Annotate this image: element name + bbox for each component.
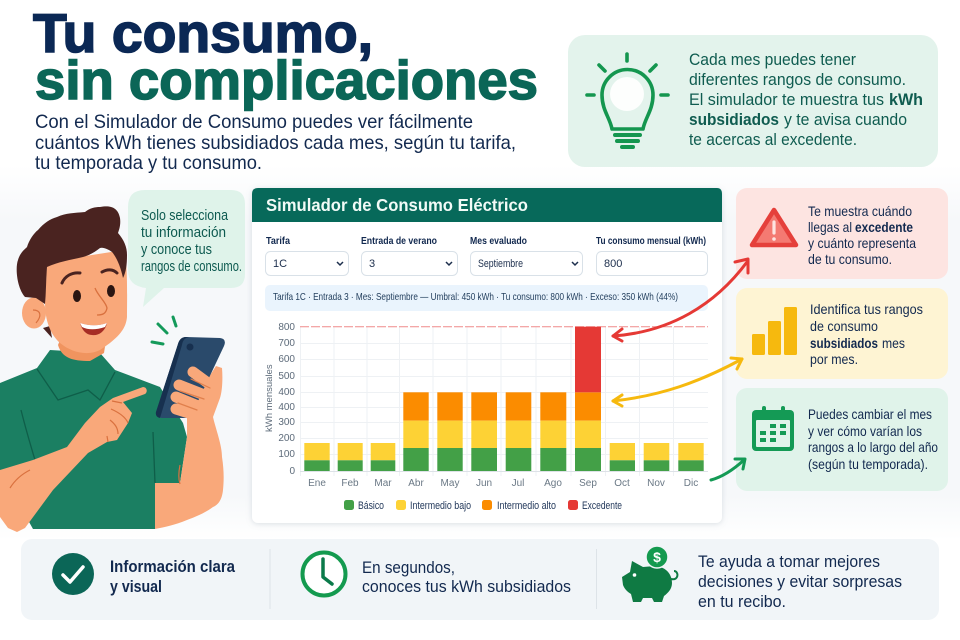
intro text <box>35 111 516 174</box>
benefit: recibo: $ <box>653 549 661 565</box>
x axis: Ago <box>544 478 562 489</box>
x axis: Feb <box>341 478 359 489</box>
pointing arm <box>0 387 147 532</box>
speech bubble: tu información <box>141 225 226 241</box>
benefit: segundos: conoces tus kWh subsidiados <box>362 578 571 596</box>
x axis: Dic <box>684 478 698 489</box>
tip text: te acercas al excedente. <box>689 130 857 149</box>
y axis: 0 <box>289 466 295 477</box>
simulator header <box>252 188 722 222</box>
x axis: Jul <box>512 478 524 489</box>
form controls: Septiembre <box>478 258 523 270</box>
y axis <box>278 322 295 477</box>
x axis: Mar <box>374 478 392 489</box>
benefit: clara: Información clara <box>110 558 236 576</box>
form controls: 1C <box>273 258 287 270</box>
form controls: 800 <box>604 258 622 270</box>
x axis: Ene <box>308 478 326 489</box>
calendario text: (según tu temporada). <box>808 456 928 472</box>
tip text: kWh <box>889 90 923 109</box>
excedente text: y cuánto representa <box>808 235 916 251</box>
form controls: Entrada de verano <box>361 235 437 247</box>
rangos text: de consumo <box>810 318 878 334</box>
ear <box>22 298 46 328</box>
tip text <box>689 50 923 149</box>
speech bubble: y conoce tus <box>141 242 212 258</box>
rangos text <box>810 301 923 367</box>
tip text: Cada mes puedes tener <box>689 50 856 69</box>
x axis: Jun <box>476 478 492 489</box>
calendario text <box>808 406 938 472</box>
icon: warning <box>752 210 796 245</box>
y axis: 200 <box>278 433 295 444</box>
excedente text: excedente <box>855 219 913 235</box>
panel: tip <box>568 35 938 167</box>
illustration: man with phone <box>0 190 245 532</box>
intro text: cuántos kWh tienes subsidiados cada mes, según tu tarifa, <box>35 132 516 154</box>
form controls: Tu consumo mensual (kWh) <box>596 235 706 247</box>
face <box>62 270 117 335</box>
tip text: El simulador te muestra tus <box>689 90 884 109</box>
y axis: 700 <box>278 338 295 349</box>
panel: excedente <box>736 188 948 279</box>
x axis: Oct <box>614 478 630 489</box>
arrow: yellow <box>613 358 742 406</box>
x axis <box>308 478 698 489</box>
excedente text: llegas al <box>808 219 852 235</box>
tip text: diferentes rangos de consumo. <box>689 70 906 89</box>
title: Tu consumo, <box>33 2 373 64</box>
simulator header: Simulador de Consumo Eléctrico <box>266 195 528 215</box>
rangos text: Identifica tus rangos <box>810 301 923 317</box>
fingers on phone <box>176 372 212 415</box>
speech bubble <box>128 190 245 307</box>
form controls <box>266 235 708 276</box>
panel: calendario <box>736 388 948 491</box>
tip text: subsidiados <box>689 110 779 129</box>
legend: Excedente <box>582 500 622 512</box>
y axis: 300 <box>278 417 295 428</box>
icon: light bulb <box>587 54 668 147</box>
rangos text: subsidiados <box>810 335 878 351</box>
status bar <box>265 285 708 311</box>
y axis: 500 <box>278 371 295 382</box>
panel: simulator <box>252 188 722 523</box>
calendario text: Puedes cambiar el mes <box>808 406 932 422</box>
y axis: 100 <box>278 449 295 460</box>
calendario text: y ver cómo varían los <box>808 423 922 439</box>
benefit: recibo: en tu recibo. <box>698 593 786 611</box>
stacked bar chart <box>264 322 708 512</box>
rangos text: por mes. <box>810 351 858 367</box>
icon: calendar <box>752 406 794 451</box>
rangos text: mes <box>882 335 905 351</box>
y axis: 600 <box>278 354 295 365</box>
x axis: Sep <box>579 478 597 489</box>
benefit: recibo: Te ayuda a tomar mejores <box>698 553 880 571</box>
benefit: clara: y visual <box>110 578 162 596</box>
panel: benefits <box>21 539 939 620</box>
title: sin complicaciones <box>35 49 538 111</box>
tip text: y te avisa cuando <box>784 110 907 129</box>
benefit: recibo: decisiones y evitar sorpresas <box>698 573 902 591</box>
hair <box>17 206 127 304</box>
x axis: Abr <box>408 478 424 489</box>
benefit: recibo <box>622 546 902 611</box>
form controls: Mes evaluado <box>470 235 527 247</box>
excedente text <box>808 203 916 267</box>
legend <box>344 500 622 512</box>
y axis: 800 <box>278 322 295 333</box>
arrow: red <box>613 259 748 341</box>
shirt <box>0 350 187 529</box>
calendario text: rangos a lo largo del año <box>808 439 938 455</box>
intro text: Con el Simulador de Consumo puedes ver fácilmente <box>35 111 473 133</box>
head <box>45 250 127 353</box>
legend: Intermedio bajo <box>410 500 471 512</box>
benefit: clara <box>52 553 236 596</box>
legend: Básico <box>358 500 384 512</box>
form controls: 3 <box>369 258 375 270</box>
legend: Intermedio alto <box>497 500 556 512</box>
excedente text: Te muestra cuándo <box>808 203 912 219</box>
benefit: segundos <box>302 552 571 596</box>
stacked bar chart: kWh mensuales <box>264 364 275 432</box>
status bar: Tarifa 1C · Entrada 3 · Mes: Septiembre — Umbral: 450 kWh · Tu consumo: 800 kWh · Exceso: 350 kWh (44%) <box>273 291 678 303</box>
bar: excess <box>575 327 601 392</box>
bars: low months <box>304 443 704 471</box>
y axis: 400 <box>278 387 295 398</box>
arrow: green <box>711 459 745 480</box>
x axis: Nov <box>647 478 665 489</box>
bars: high months <box>403 392 601 471</box>
neck <box>58 340 106 361</box>
hair back <box>43 326 52 338</box>
speech bubble: rangos de consumo. <box>141 259 242 275</box>
benefit: segundos: En segundos, <box>362 559 455 577</box>
panel: rangos <box>736 288 948 379</box>
title <box>33 2 538 111</box>
phone arm <box>155 366 224 529</box>
motion marks <box>152 317 176 344</box>
speech bubble: Solo selecciona <box>141 208 229 224</box>
icon: bars <box>752 307 797 355</box>
y axis: 400 <box>278 402 295 413</box>
intro text: tu temporada y tu consumo. <box>35 152 262 174</box>
form controls: Tarifa <box>266 235 290 247</box>
phone <box>156 337 225 418</box>
x axis: May <box>441 478 459 489</box>
excedente text: de tu consumo. <box>808 251 892 267</box>
